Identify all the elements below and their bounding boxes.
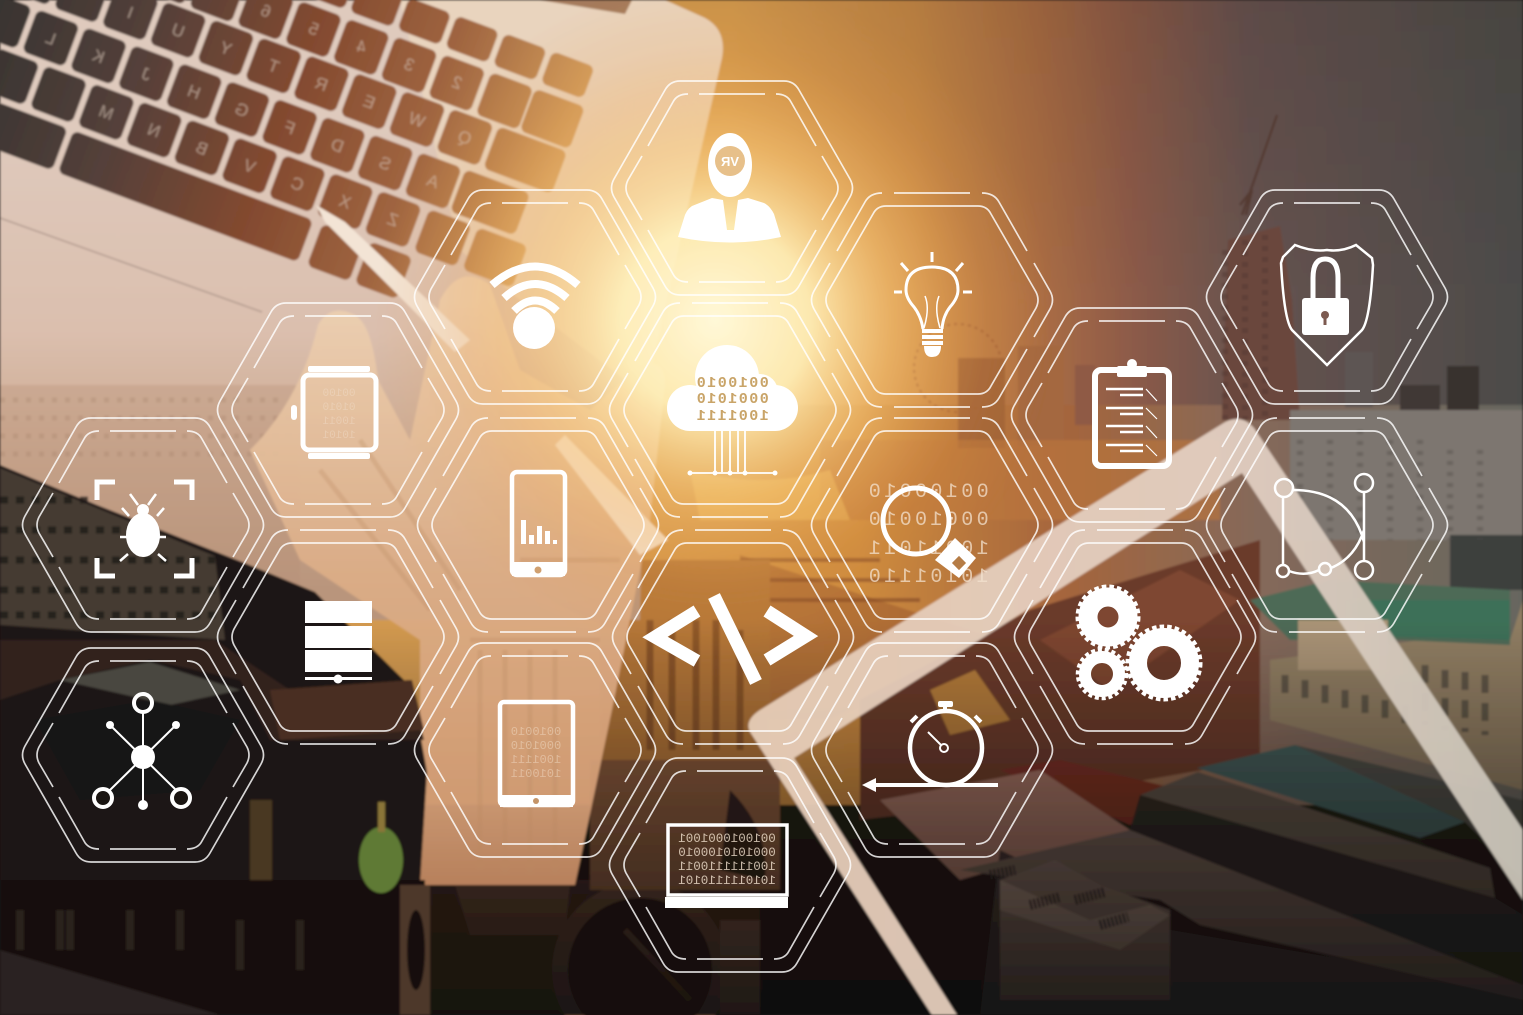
- darkening toward the bottom: [0, 600, 1523, 1015]
- icon: smartwatch: 10011: [322, 416, 356, 428]
- hexagon: cloud: [610, 303, 850, 517]
- icon: code brackets: [655, 596, 806, 682]
- icon: light bulb: [894, 252, 972, 357]
- QWERTY row: T: [265, 56, 282, 77]
- QWERTY row: E: [360, 91, 378, 113]
- number row: 2: [449, 72, 465, 93]
- ASDF row: K: [89, 45, 107, 67]
- QWERTY row: I: [125, 3, 136, 23]
- sky: [0, 0, 1523, 420]
- icon: magnifier and binary: 00100010: [865, 481, 989, 504]
- ZXCV row: B: [193, 138, 210, 159]
- icon: bug: [97, 482, 192, 576]
- hexagon: clipboard: [1012, 308, 1252, 522]
- hexagon: laptop: [610, 758, 850, 972]
- hexagon: gears: [1014, 530, 1256, 744]
- number row: 3: [401, 54, 417, 75]
- icon: tablet: 0001010: [511, 739, 561, 753]
- icon: smartwatch: 10101: [322, 430, 356, 442]
- hexagon: network: [22, 648, 264, 862]
- icon: cloud data: 0001010: [695, 391, 769, 408]
- tablet frame: [748, 419, 1523, 1015]
- speaker strip: [540, 0, 632, 14]
- laptop right light: [400, 0, 723, 395]
- icon: magnifier and binary: [865, 481, 989, 589]
- hexagon: phone: [418, 418, 658, 632]
- icon: laptop code: 0010010001001: [678, 832, 776, 846]
- QWERTY row: Y: [217, 38, 234, 59]
- hexagon: idea bulb: [812, 193, 1052, 407]
- ASDF row: H: [185, 81, 203, 103]
- dome: [359, 802, 430, 1015]
- icon: phone with chart: [512, 472, 565, 576]
- pen: [316, 205, 668, 555]
- icon: tablet: 1001111: [511, 753, 561, 767]
- ZXCV row: N: [145, 120, 163, 142]
- column building: [590, 560, 780, 890]
- space bar row: [0, 102, 411, 297]
- icon: wifi: [492, 266, 578, 349]
- hazy city through laptop: [0, 385, 300, 600]
- icon: tablet: 1010011: [511, 767, 561, 781]
- QWERTY row: U: [169, 20, 187, 42]
- hexagon: stopwatch: [812, 643, 1052, 857]
- distant city band: [0, 405, 1523, 805]
- hexagon: VR: [612, 81, 852, 295]
- hexagon: code: [612, 530, 854, 744]
- ZXCV row: X: [336, 191, 354, 213]
- ZXCV row: [0, 50, 526, 286]
- ASDF row: J: [139, 64, 154, 85]
- hexagon: tablet: [414, 643, 656, 857]
- orange rooftops: [860, 540, 1260, 820]
- icon: smartwatch: 00100: [322, 388, 356, 400]
- icon: tablet: 0010010: [511, 725, 561, 739]
- clock tower: [430, 880, 760, 1015]
- hexagon: security lock: [1206, 190, 1448, 404]
- ZXCV row: M: [96, 101, 116, 124]
- QWERTY row: W: [406, 108, 428, 132]
- right buildings: [1270, 600, 1523, 790]
- icon: shield with padlock: [1281, 245, 1373, 365]
- ASDF row: A: [424, 170, 441, 192]
- QWERTY row: [8, 0, 565, 192]
- skyline: [820, 115, 1523, 590]
- icon: smartwatch: 01010: [322, 402, 356, 414]
- hand overlay detail: [320, 440, 620, 875]
- ZXCV row: V: [240, 155, 258, 177]
- ASDF row: [0, 0, 528, 234]
- icon: laptop code: 1010111110101: [678, 874, 776, 888]
- icon: magnifier and binary: 10011011: [865, 538, 989, 561]
- icon: laptop code: 1001111110011: [678, 860, 776, 874]
- ASDF row: G: [232, 99, 251, 121]
- icon: tablet: [500, 702, 573, 807]
- icon: network nodes: [94, 694, 190, 810]
- icon: vector curve: [1275, 474, 1373, 579]
- icon: clipboard checklist: [1095, 359, 1169, 466]
- number row: [48, 0, 583, 147]
- central glow: [375, 0, 1055, 660]
- hexagon: vector curve: [1206, 418, 1448, 632]
- number row: 5: [306, 19, 321, 40]
- hexagon: server: [218, 530, 458, 744]
- ASDF row: S: [376, 153, 394, 174]
- ASDF row: L: [43, 28, 58, 49]
- icon: VR person: VR: [720, 154, 739, 169]
- icon: VR person: [678, 133, 781, 242]
- icon: stopwatch: [862, 701, 998, 792]
- ASDF row: F: [281, 117, 298, 139]
- QWERTY row: R: [312, 73, 330, 95]
- icon: magnifier and binary: 10101110: [865, 566, 989, 589]
- trackpad edge: [0, 218, 262, 312]
- hexagon: smartwatch: [218, 303, 458, 517]
- mid city orange streets: [740, 555, 1000, 720]
- number row: 4: [354, 36, 369, 57]
- icon: laptop code: [665, 825, 788, 908]
- icon: cloud data: [667, 345, 798, 476]
- laptop body: [0, 0, 723, 620]
- icon: smartwatch: [291, 366, 376, 459]
- number row: 6: [258, 1, 274, 22]
- hand: [250, 276, 665, 885]
- function row: [113, 0, 593, 97]
- left foreground buildings: [0, 465, 427, 1015]
- ZXCV row: Z: [385, 209, 401, 231]
- icon: laptop code: 0001010100010: [678, 846, 776, 860]
- hexagon: bug detection: [22, 418, 264, 632]
- keyboard: [0, 0, 597, 336]
- ZXCV row: C: [288, 173, 306, 195]
- hexagon: wifi: [414, 190, 656, 404]
- icon: server stack: [305, 601, 372, 684]
- icon: magnifier and binary: 00010010: [865, 509, 989, 532]
- icon: cloud data: 1001111: [695, 408, 769, 425]
- ASDF row: D: [328, 135, 346, 157]
- icon: cloud data: 0010010: [695, 375, 769, 392]
- hexagon: data search: [812, 418, 1052, 632]
- QWERTY row: Q: [455, 127, 474, 149]
- icon: gears: [1078, 587, 1200, 699]
